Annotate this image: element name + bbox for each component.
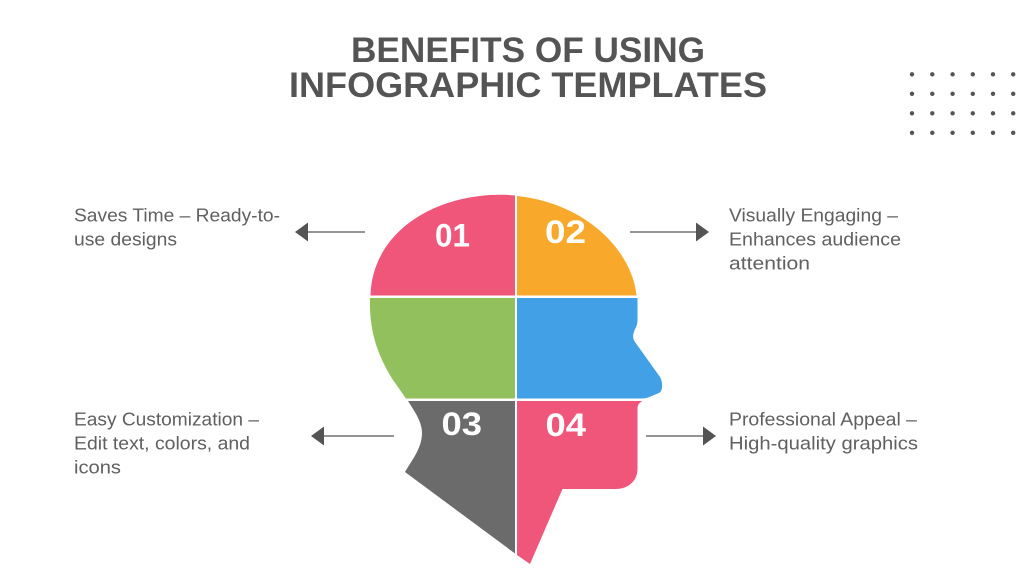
segment 04: pink jaw	[517, 401, 642, 564]
text: easy customization	[74, 408, 260, 478]
segment 04: pink jaw: 04	[546, 407, 586, 443]
arrow: to easy customization	[311, 426, 394, 446]
title: BENEFITS OF USING	[351, 31, 705, 70]
title: INFOGRAPHIC TEMPLATES	[289, 66, 767, 105]
arrow: to saves time	[295, 222, 365, 242]
text: saves time	[74, 204, 280, 250]
text: saves time: Saves Time – Ready-to-	[74, 204, 280, 226]
text: professional appeal: Professional Appeal –	[729, 408, 918, 430]
segment: green back of head	[370, 298, 515, 398]
text: saves time: use designs	[74, 228, 177, 250]
segment 02: orange crown	[517, 196, 636, 296]
text: visually engaging: Visually Engaging –	[729, 204, 899, 226]
text: visually engaging: attention	[729, 252, 810, 274]
segment 03: grey neck	[405, 401, 515, 554]
head diagram	[370, 195, 662, 564]
title	[289, 31, 767, 105]
text: easy customization: Easy Customization –	[74, 408, 260, 430]
arrow: to professional appeal	[646, 426, 716, 446]
text: professional appeal	[729, 408, 918, 454]
text: easy customization: icons	[74, 456, 121, 478]
text: visually engaging	[729, 204, 901, 274]
dot grid decoration	[910, 72, 1015, 135]
text: visually engaging: Enhances audience	[729, 228, 901, 250]
arrow: to visually engaging	[630, 222, 709, 242]
segment 02: orange crown: 02	[545, 214, 586, 250]
segment: blue face	[517, 298, 662, 398]
segment 01: pink crown	[370, 195, 515, 296]
text: easy customization: Edit text, colors, and	[74, 432, 250, 454]
segment 01: pink crown: 01	[435, 218, 470, 254]
segment 03: grey neck: 03	[442, 406, 482, 442]
text: professional appeal: High-quality graphics	[729, 432, 918, 454]
